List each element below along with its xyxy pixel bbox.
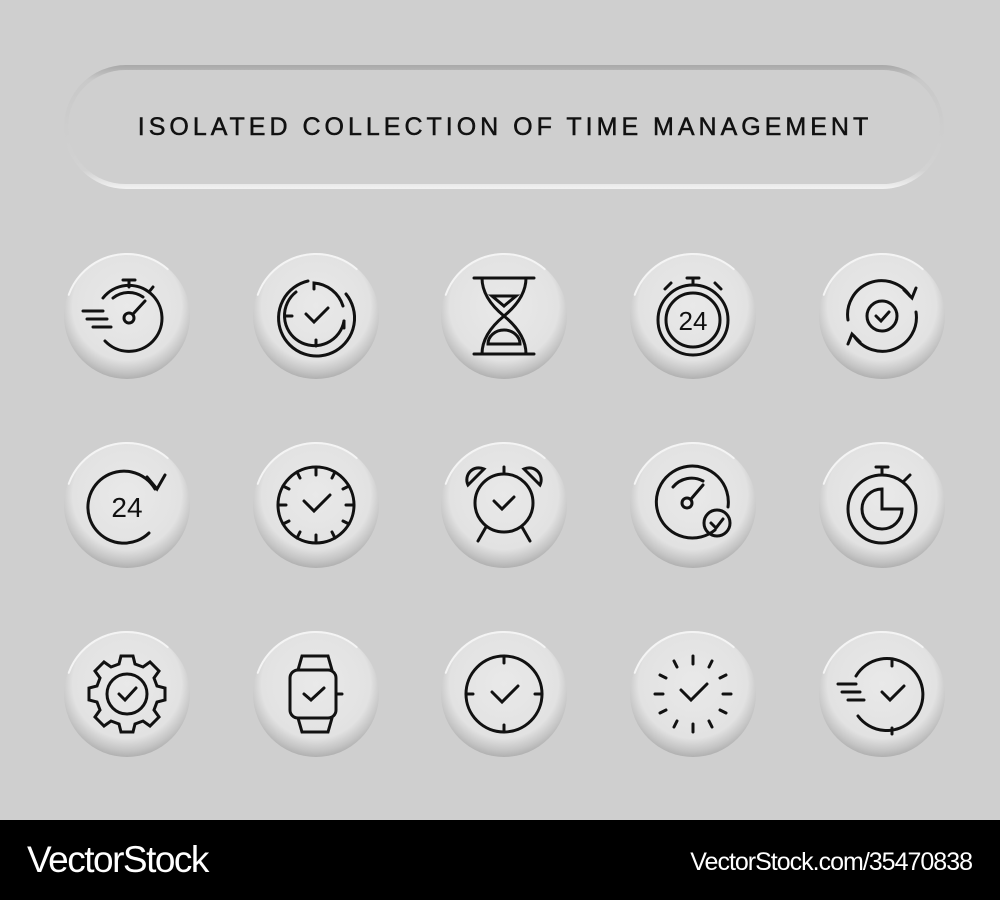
icon: clock simple bbox=[425, 615, 583, 773]
icon: 24 stopwatch: 24 bbox=[679, 306, 707, 336]
icon: speedometer check bbox=[614, 426, 772, 584]
icon: 24 stopwatch bbox=[614, 237, 772, 395]
icon: stopwatch pie bbox=[803, 426, 961, 584]
footer bar bbox=[0, 820, 1000, 900]
icon: dashed clock bbox=[614, 615, 772, 773]
icon: 24 refresh bbox=[48, 426, 206, 584]
icon: fast stopwatch bbox=[48, 237, 206, 395]
title: ISOLATED COLLECTION OF TIME MANAGEMENT bbox=[138, 113, 872, 141]
icon: 24 refresh: 24 bbox=[111, 492, 143, 523]
footer url: VectorStock.com/35470838 bbox=[690, 848, 972, 876]
icon: smartwatch bbox=[237, 615, 395, 773]
icon: clock refresh bbox=[803, 237, 961, 395]
title pill bbox=[64, 65, 944, 189]
icon: fast clock bbox=[803, 615, 961, 773]
icon: hourglass bbox=[425, 237, 583, 395]
icon: clock ticks bbox=[237, 426, 395, 584]
footer logo: VectorStock bbox=[27, 839, 210, 880]
icon: clock with arrows bbox=[237, 237, 395, 395]
icon grid bbox=[48, 237, 961, 773]
icon: alarm clock bbox=[425, 426, 583, 584]
icon: gear clock bbox=[48, 615, 206, 773]
